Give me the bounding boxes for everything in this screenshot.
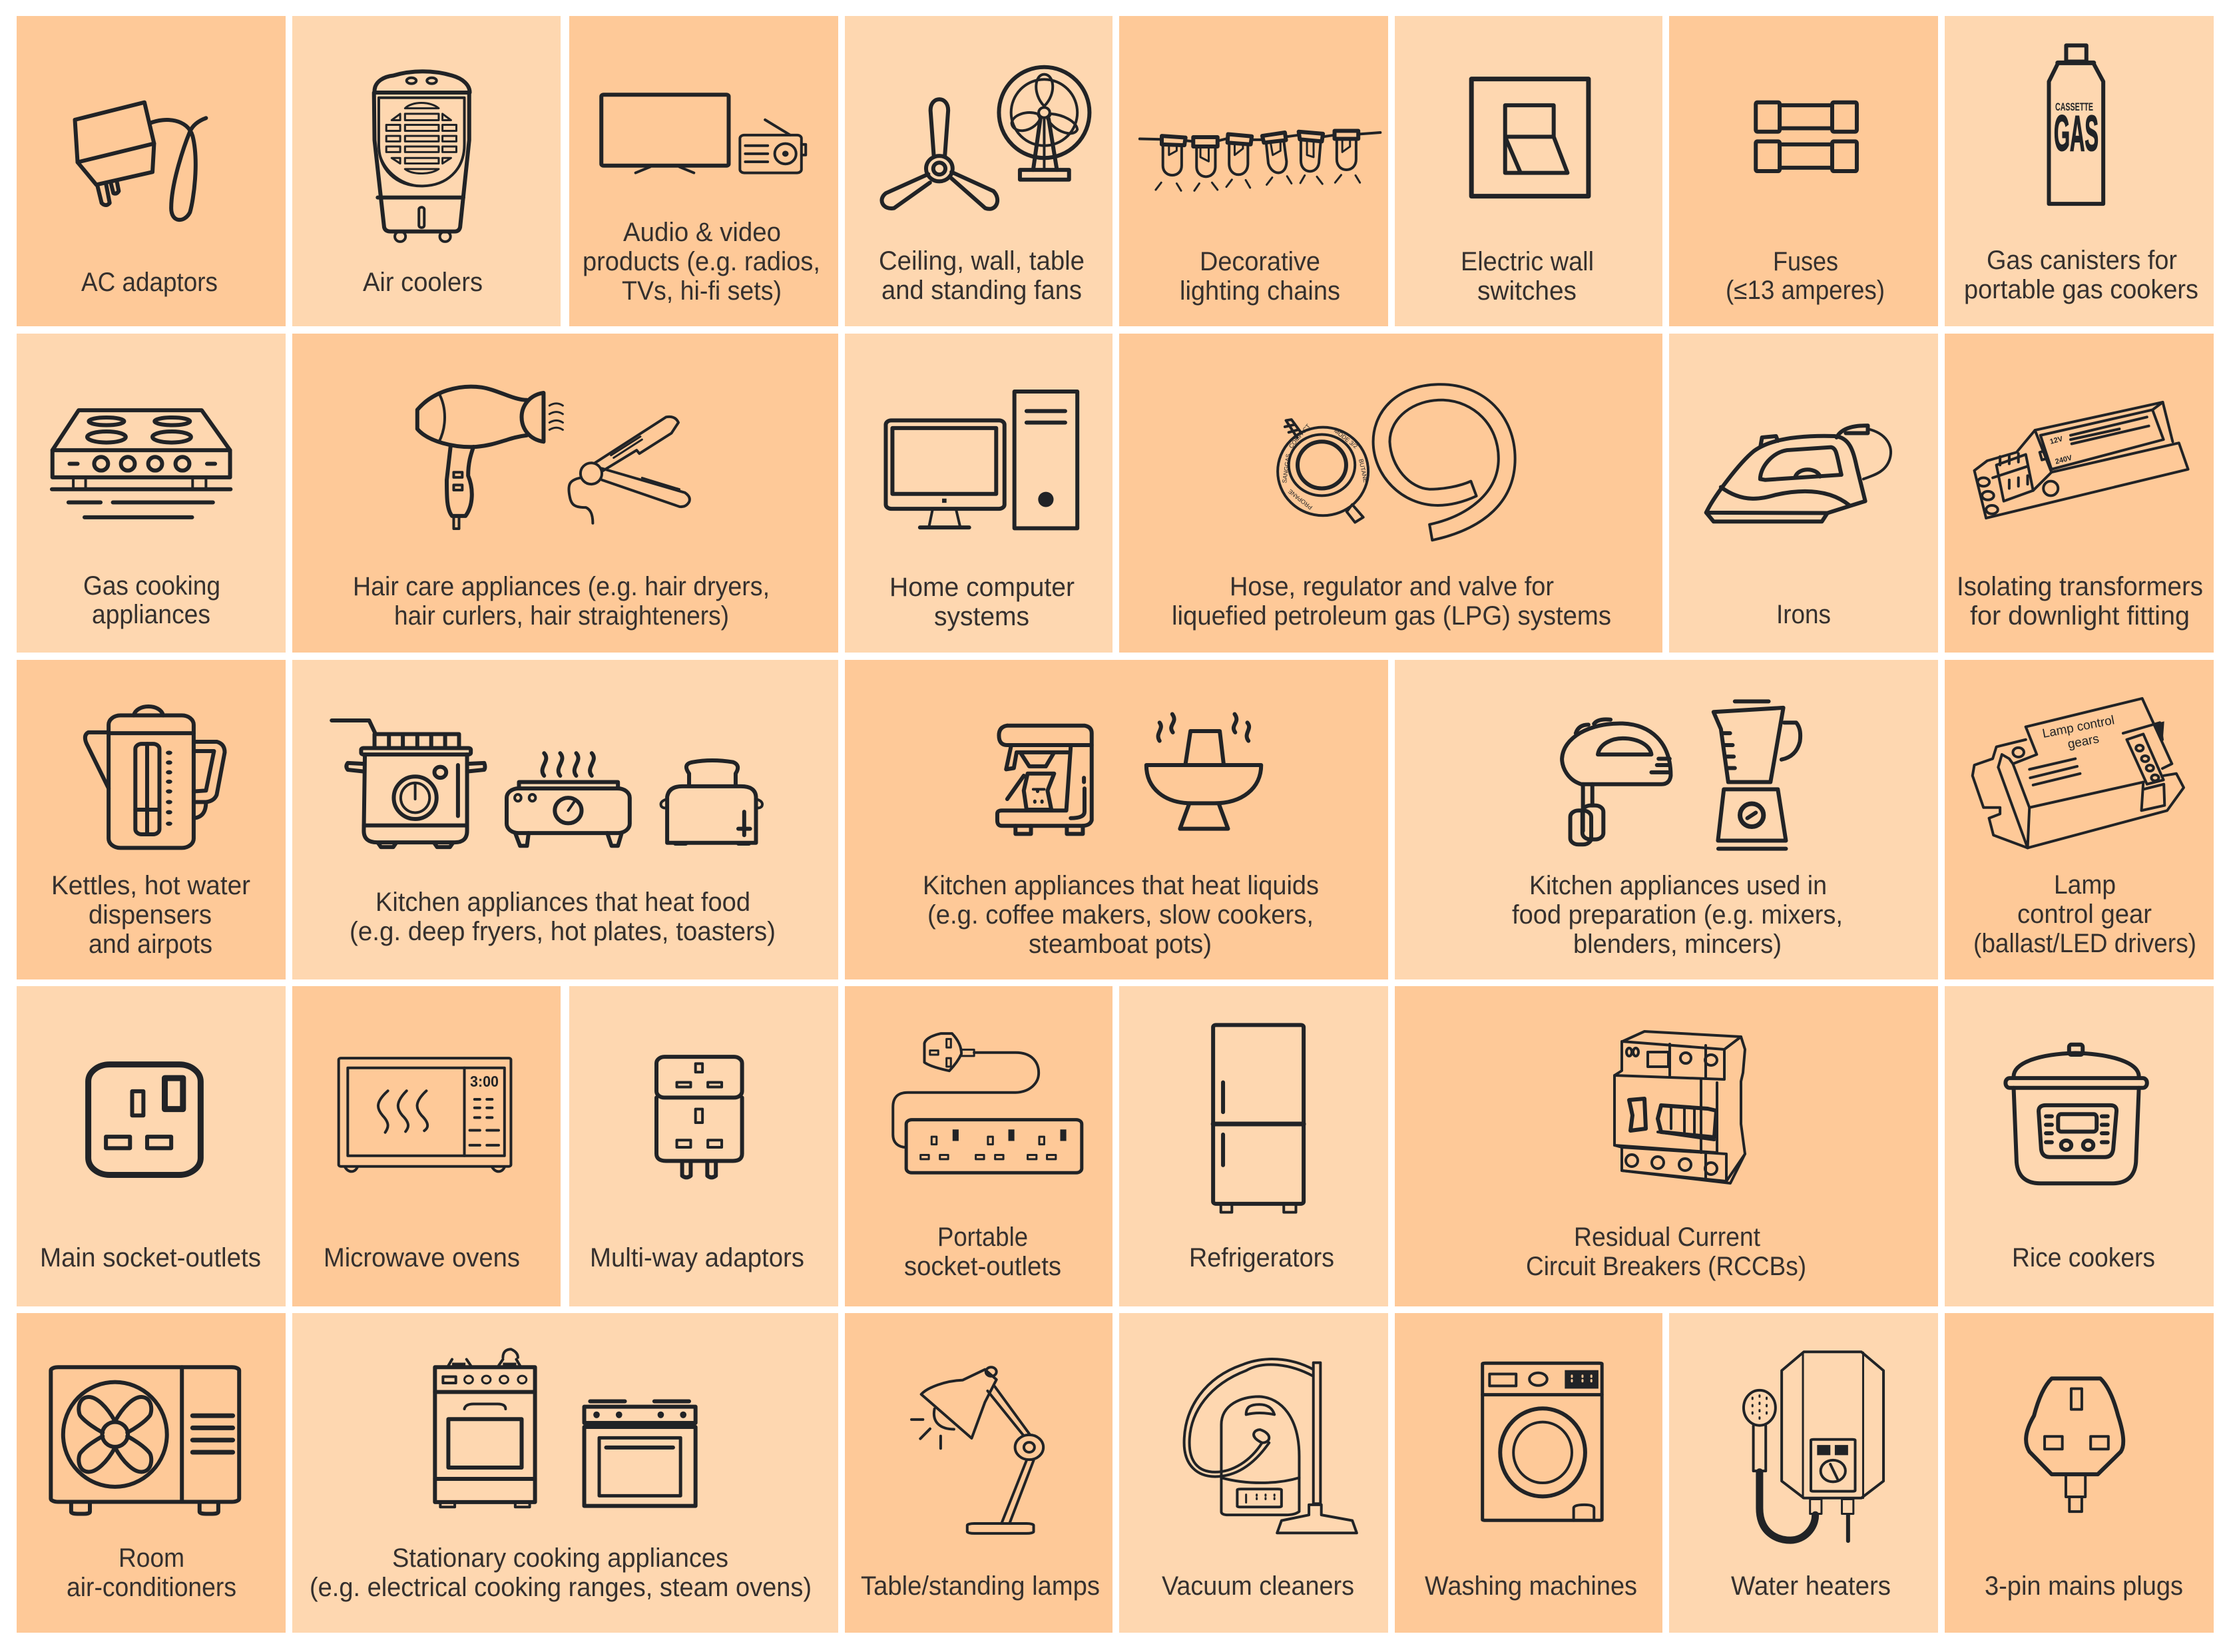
label: Kitchen appliances that heat liquids: steamboat pots) xyxy=(1029,930,1212,959)
label: Fans xyxy=(879,246,1085,305)
panel: Kitchen appliances for food preparation xyxy=(1395,660,1938,979)
icon: fryer, hot plate and toaster xyxy=(332,720,762,847)
label: Kitchen appliances that heat food: Kitchen appliances that heat food xyxy=(375,888,750,917)
panel: Main socket-outlets xyxy=(17,986,286,1306)
label: Washing machines: Washing machines xyxy=(1425,1571,1637,1601)
icon: microwave: 3:00 xyxy=(470,1073,499,1090)
panel: Irons xyxy=(1669,334,1938,653)
label: Lamp control gear: (ballast/LED drivers) xyxy=(1973,929,2196,958)
icon: air cooler xyxy=(374,71,470,242)
panel: Home computer systems xyxy=(845,334,1113,653)
icon: transformer: 12V xyxy=(2049,435,2064,446)
icon: washing machine xyxy=(1483,1363,1602,1521)
label: Isolating transformers: Isolating transformers xyxy=(1957,572,2203,601)
icon: regulator and hose: COMPACT xyxy=(1288,423,1312,449)
icon: vacuum cleaner xyxy=(1184,1359,1357,1533)
label: Home computer systems: Home computer xyxy=(889,573,1075,602)
label: Kettles: and airpots xyxy=(89,930,212,959)
label: Electric wall switches: switches xyxy=(1477,276,1577,306)
icon: desk lamp xyxy=(911,1367,1043,1533)
icon: RCCB xyxy=(1614,1031,1745,1183)
icon: multi-way adaptor xyxy=(656,1057,742,1177)
label: LPG hose, regulator and valve: Hose, regulator and valve for xyxy=(1230,572,1554,601)
panel: Rice cookers xyxy=(1945,986,2214,1306)
label: Refrigerators: Refrigerators xyxy=(1189,1243,1334,1272)
label: Rice cookers: Rice cookers xyxy=(2012,1243,2155,1272)
panel: Kettles xyxy=(17,660,286,979)
label: Lamp control gear: control gear xyxy=(2017,900,2152,929)
icon: steam iron xyxy=(1706,425,1891,521)
panel: LPG hose, regulator and valve xyxy=(1119,334,1662,653)
label: Fuses xyxy=(1726,247,1885,305)
label: Fans: and standing fans xyxy=(881,276,1082,305)
label: Kitchen appliances for food preparation xyxy=(1512,871,1843,959)
label: Decorative lighting chains: lighting chains xyxy=(1180,276,1340,306)
label: Air coolers: Air coolers xyxy=(363,268,483,297)
label: Kettles: Kettles, hot water xyxy=(51,871,250,900)
label: Room air-conditioners: air-conditioners xyxy=(67,1573,236,1602)
panel: Room air-conditioners xyxy=(17,1313,286,1633)
label: LPG hose, regulator and valve xyxy=(1172,572,1611,631)
label: Lamp control gear xyxy=(1973,870,2196,958)
label: Kitchen appliances that heat liquids: (e.g. coffee makers, slow cookers, xyxy=(927,900,1314,930)
icon: wall socket xyxy=(89,1065,200,1175)
panel: Residual Current Circuit Breakers xyxy=(1395,986,1938,1306)
icon: wall switch xyxy=(1471,79,1589,196)
label: Audio and video products xyxy=(583,218,820,306)
label: Hair care appliances: hair curlers, hair straighteners) xyxy=(394,601,729,631)
panel: Multi-way adaptors xyxy=(569,986,838,1306)
label: Kitchen appliances for food preparation: Kitchen appliances used in xyxy=(1529,871,1827,900)
panel: Lamp control gear xyxy=(1945,660,2214,979)
icon: microwave xyxy=(339,1058,511,1171)
panel: Water heaters xyxy=(1669,1313,1938,1633)
icon: desktop computer xyxy=(885,392,1077,528)
label: Portable socket-outlets: Portable xyxy=(937,1223,1028,1252)
label: Home computer systems xyxy=(889,573,1075,631)
panel: Isolating transformers xyxy=(1945,334,2214,653)
label: Gas canisters xyxy=(1964,246,2198,304)
label: Kitchen appliances that heat food xyxy=(350,888,776,946)
label: Decorative lighting chains xyxy=(1180,247,1340,306)
label: Water heaters: Water heaters xyxy=(1731,1571,1891,1601)
icon: 3-pin plug xyxy=(2026,1378,2123,1512)
label: Fuses: Fuses xyxy=(1773,247,1838,276)
icon: refrigerator xyxy=(1213,1025,1304,1213)
label: Stationary cooking appliances: (e.g. electrical cooking ranges, steam ovens) xyxy=(310,1573,812,1602)
icon: water heater xyxy=(1744,1352,1883,1541)
icon: ceiling and table fans xyxy=(881,67,1089,209)
label: Vacuum cleaners: Vacuum cleaners xyxy=(1162,1571,1354,1601)
panel: Washing machines xyxy=(1395,1313,1662,1633)
label: Gas cooking appliances: Gas cooking xyxy=(83,571,220,601)
icon: transformer: 240V xyxy=(2055,453,2073,466)
icon: regulator and hose: PROPANE xyxy=(1287,488,1314,511)
label: Stationary cooking appliances xyxy=(310,1543,812,1602)
icon: hair dryer and straightener xyxy=(417,387,690,529)
label: Kitchen appliances that heat food: (e.g. deep fryers, hot plates, toasters) xyxy=(350,917,776,946)
label: Isolating transformers xyxy=(1957,572,2203,631)
label: Kitchen appliances that heat liquids xyxy=(923,871,1319,959)
icon: lamp control gear box xyxy=(1973,698,2184,848)
label: Audio and video products: Audio & video xyxy=(623,218,781,247)
label: Electric wall switches xyxy=(1461,247,1594,306)
icon: AC adaptor xyxy=(75,103,206,220)
panel: Microwave ovens xyxy=(292,986,561,1306)
panel: Decorative lighting chains xyxy=(1119,16,1388,326)
label: 3-pin mains plugs: 3-pin mains plugs xyxy=(1985,1571,2183,1601)
panel: Hair care appliances xyxy=(292,334,838,653)
panel: Table/standing lamps xyxy=(845,1313,1113,1633)
label: Home computer systems: systems xyxy=(934,602,1029,631)
panel: Fans xyxy=(845,16,1113,326)
icon: regulator and hose xyxy=(1278,384,1515,540)
icon: rice cooker xyxy=(2005,1045,2147,1183)
icon: kettle xyxy=(85,706,225,848)
label: Stationary cooking appliances: Stationary cooking appliances xyxy=(392,1543,728,1573)
label: Decorative lighting chains: Decorative xyxy=(1200,247,1320,276)
panel: AC adaptors xyxy=(17,16,286,326)
icon: extension lead xyxy=(893,1033,1082,1173)
label: Kettles: dispensers xyxy=(89,900,212,930)
label: Kitchen appliances for food preparation: blenders, mincers) xyxy=(1573,930,1782,959)
label: Microwave ovens: Microwave ovens xyxy=(324,1243,520,1272)
label: Kitchen appliances for food preparation: food preparation (e.g. mixers, xyxy=(1512,900,1843,930)
panel: Stationary cooking appliances xyxy=(292,1313,838,1633)
panel: Electric wall switches xyxy=(1395,16,1662,326)
panel: Air coolers xyxy=(292,16,561,326)
panel: Kitchen appliances that heat food xyxy=(292,660,838,979)
label: Table/standing lamps: Table/standing lamps xyxy=(861,1571,1100,1601)
label: Residual Current Circuit Breakers: Circuit Breakers (RCCBs) xyxy=(1526,1252,1806,1281)
icon: lamp control gear box: gears xyxy=(2067,732,2101,752)
label: Lamp control gear: Lamp xyxy=(2054,870,2116,900)
panel: Portable socket-outlets xyxy=(845,986,1113,1306)
panel: Gas cooking appliances xyxy=(17,334,286,653)
label: Fans: Ceiling, wall, table xyxy=(879,246,1085,276)
label: Fuses: (≤13 amperes) xyxy=(1726,276,1885,305)
label: Residual Current Circuit Breakers: Residual Current xyxy=(1574,1223,1760,1252)
label: Multi-way adaptors: Multi-way adaptors xyxy=(590,1243,804,1272)
label: Room air-conditioners xyxy=(67,1543,236,1602)
label: Kettles xyxy=(51,871,250,959)
panel: Fuses xyxy=(1669,16,1938,326)
label: Main socket-outlets: Main socket-outlets xyxy=(40,1243,261,1272)
panel: Kitchen appliances that heat liquids xyxy=(845,660,1388,979)
label: Irons: Irons xyxy=(1776,600,1831,629)
panel: Audio and video products xyxy=(569,16,838,326)
label: Gas canisters: Gas canisters for xyxy=(1987,246,2177,275)
icon: hand mixer and blender xyxy=(1562,701,1800,849)
icon: TV and radio xyxy=(601,95,806,173)
label: Gas canisters: portable gas cookers xyxy=(1964,275,2198,304)
icon: regulator and hose: BUTANE xyxy=(1358,458,1369,483)
icon: lighting chain xyxy=(1140,131,1380,190)
panel: Gas canisters: GAS xyxy=(2054,105,2099,161)
icon: gas canister: CASSETTE xyxy=(2055,101,2093,113)
label: Kitchen appliances that heat liquids: Kitchen appliances that heat liquids xyxy=(923,871,1319,900)
label: Electric wall switches: Electric wall xyxy=(1461,247,1594,276)
icon: cooking ranges xyxy=(435,1349,696,1507)
panel: Gas canisters xyxy=(1945,16,2214,326)
label: Room air-conditioners: Room xyxy=(119,1543,184,1573)
icon: transformer xyxy=(1974,402,2188,518)
panel: Vacuum cleaners xyxy=(1119,1313,1388,1633)
icon: coffee maker and steamboat xyxy=(997,714,1261,834)
panel: Refrigerators xyxy=(1119,986,1388,1306)
icon: air-conditioner outdoor unit xyxy=(51,1367,239,1514)
icon: regulator and hose: SANGGAS xyxy=(1281,453,1292,483)
label: Isolating transformers: for downlight fitting xyxy=(1970,601,2190,631)
icon: lamp control gear box: Lamp control xyxy=(2041,713,2116,741)
label: Hair care appliances: Hair care appliances (e.g. hair dryers, xyxy=(353,572,770,601)
icon: gas canister xyxy=(2049,45,2103,204)
label: Portable socket-outlets: socket-outlets xyxy=(904,1252,1061,1281)
label: Residual Current Circuit Breakers xyxy=(1526,1223,1806,1281)
icon: regulator and hose: MODE 3/2 xyxy=(1333,427,1359,449)
label: Audio and video products: TVs, hi-fi sets) xyxy=(622,276,782,306)
label: LPG hose, regulator and valve: liquefied petroleum gas (LPG) systems xyxy=(1172,601,1611,631)
label: Gas cooking appliances xyxy=(83,571,220,629)
panel: 3-pin mains plugs xyxy=(1945,1313,2214,1633)
label: Audio and video products: products (e.g. radios, xyxy=(583,247,820,276)
label: Portable socket-outlets xyxy=(904,1223,1061,1281)
label: Hair care appliances xyxy=(353,572,770,631)
icon: gas hob xyxy=(52,410,230,517)
label: AC adaptors: AC adaptors xyxy=(81,268,218,297)
label: Gas cooking appliances: appliances xyxy=(92,600,210,629)
icon: fuses xyxy=(1756,103,1857,171)
